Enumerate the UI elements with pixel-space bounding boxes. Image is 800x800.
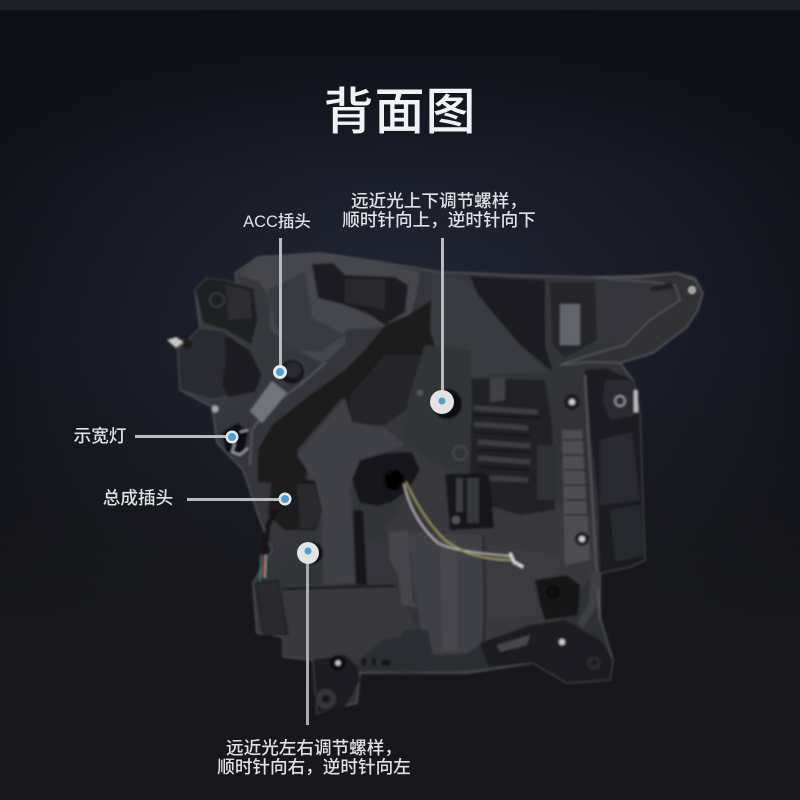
label: high/low beam vertical adjust screw <box>342 188 536 232</box>
marker: position lamp <box>226 430 238 444</box>
central diagonal dark channel <box>258 300 440 485</box>
lamp wires <box>404 484 510 556</box>
curved pipe <box>580 572 595 625</box>
callout line: beam up/down <box>441 238 444 401</box>
small grey label <box>560 304 580 345</box>
vertical center panel <box>408 533 484 655</box>
adjust screw top socket <box>432 389 462 419</box>
callout line: beam left/right <box>306 560 309 725</box>
callout line: harness connector <box>187 498 285 501</box>
upper right wing <box>560 273 703 365</box>
right plate diagonal <box>430 272 548 382</box>
marker: ACC <box>273 365 287 379</box>
label: high/low beam horizontal adjust screw: 远近光左右调节螺样， <box>226 735 402 760</box>
left dark lamp socket <box>195 278 258 345</box>
lower main body <box>283 587 418 660</box>
left lower housing <box>178 328 262 400</box>
side bulb <box>167 337 184 348</box>
wing mounting hole <box>688 286 696 294</box>
label: high/low beam horizontal adjust screw <box>217 735 411 779</box>
bottom teeth <box>360 630 490 673</box>
hanging connector <box>255 580 288 636</box>
upper dark bracket <box>312 263 408 325</box>
lower center connector <box>445 473 494 530</box>
wiring <box>264 510 276 580</box>
light rib <box>250 362 326 465</box>
knob socket region <box>405 345 472 470</box>
marker: beam left/right knob <box>297 542 319 564</box>
grey label plate <box>250 381 287 423</box>
ACC socket <box>279 359 305 385</box>
title: 背面图 <box>324 72 476 144</box>
lower right wedge bracket <box>480 620 613 683</box>
central ladder column <box>562 430 590 565</box>
callout line: position lamp <box>135 435 232 438</box>
label: harness connector: 总成插头 <box>103 485 173 510</box>
lower central grey mass <box>385 445 598 655</box>
stepped ribs <box>470 378 555 515</box>
label: high/low beam vertical adjust screw: 顺时针向上，逆时针向下 <box>342 207 536 232</box>
lower left panels <box>363 535 397 585</box>
callout line: ACC <box>279 238 282 372</box>
screw post <box>564 394 580 410</box>
label: high/low beam vertical adjust screw: 远近光上下调节螺样， <box>351 188 527 213</box>
upper panel <box>238 254 420 363</box>
right edge column <box>585 368 645 573</box>
marker: harness connector <box>278 492 292 506</box>
label: position lamp: 示宽灯 <box>74 423 126 448</box>
central grey panel <box>297 398 405 510</box>
label: ACC connector: ACC插头 <box>243 208 311 232</box>
adjust screw bottom socket <box>301 542 323 564</box>
label: high/low beam horizontal adjust screw: 顺时针向右，逆时针向左 <box>217 754 411 779</box>
marker: beam up/down knob <box>430 390 454 414</box>
position lamp socket <box>222 423 248 452</box>
housing silhouette <box>178 253 703 713</box>
headlight rear housing <box>167 253 703 713</box>
bottom mount with grille <box>313 655 360 713</box>
lower right screw <box>575 532 589 546</box>
dark pipe opening <box>352 452 420 506</box>
